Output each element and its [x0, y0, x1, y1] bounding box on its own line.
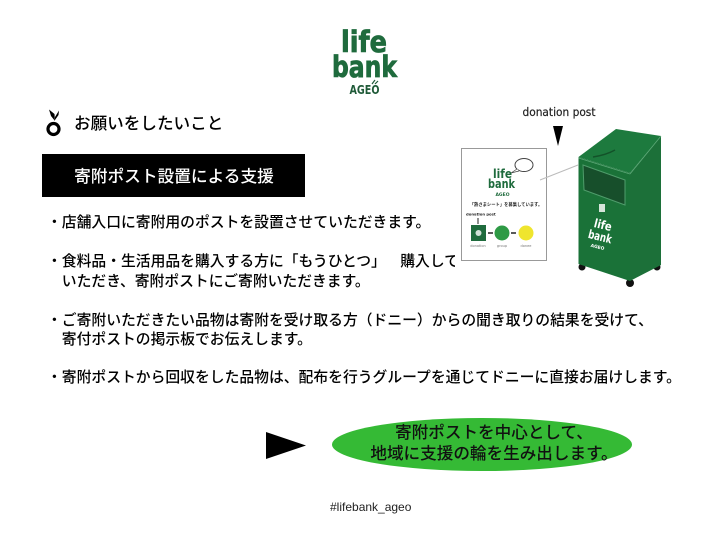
- illustration: donation post and poster: [455, 105, 662, 287]
- text block: item 2: ・食料品・生活用品を購入する方に「もうひとつ」 購入して: [47, 254, 459, 270]
- text block: item 1: ・店舗入口に寄附用のポストを設置させていただきます。: [47, 215, 430, 231]
- banner: support through donation post: [42, 154, 305, 197]
- arrow: right pointing triangle: [266, 432, 306, 459]
- poster: group: [497, 244, 508, 248]
- poster: donation post: [466, 212, 496, 216]
- logo: life bank AGEO: [332, 25, 398, 97]
- text block: item 4: ・寄附ポストから回収をした品物は、配布を行うグループを通じてドニーに直接お届けします。: [47, 370, 681, 386]
- logo: life bank AGEO: life: [341, 25, 387, 59]
- poster: donee: [521, 244, 531, 248]
- poster: AGEO: [495, 192, 510, 198]
- post box: life: [593, 216, 613, 234]
- text block: item 3: 寄付ポストの掲示板でお伝えします。: [62, 332, 312, 348]
- text block: item 2: いただき、寄附ポストにご寄附いただきます。: [62, 274, 370, 290]
- logo: life bank AGEO: AGEO: [350, 83, 380, 97]
- poster: bank: [488, 177, 516, 191]
- text block: item 3: ・ご寄附いただきたい品物は寄附を受け取る方（ドニー）からの聞き取りの結果を受けて、: [47, 313, 653, 329]
- post box: bank: [587, 227, 614, 247]
- hashtag: #lifebank_ageo: [330, 500, 411, 514]
- label: donation post: donation post: [522, 105, 596, 119]
- heading: request: お願いをしたいこと: [74, 114, 223, 133]
- callout: green ellipse message: 地域に支援の輪を生み出します。: [370, 444, 618, 463]
- text block: item 2: [47, 253, 459, 290]
- arrow: pointing down: [553, 126, 563, 146]
- poster: donation: [470, 244, 486, 248]
- banner: support through donation post: 寄附ポスト設置による支援: [74, 167, 274, 186]
- pointer line: [540, 165, 578, 180]
- post box: AGEO: [590, 243, 605, 252]
- icon: sprout ring: [46, 110, 61, 136]
- poster: life: [493, 167, 512, 181]
- post box: [578, 129, 661, 287]
- poster: 「熱さまシート」を募集しています。: [470, 201, 542, 208]
- callout: green ellipse message: [332, 418, 632, 471]
- text block: item 3: [47, 312, 653, 348]
- poster: [462, 148, 546, 260]
- callout: green ellipse message: 寄附ポストを中心として、: [395, 423, 593, 442]
